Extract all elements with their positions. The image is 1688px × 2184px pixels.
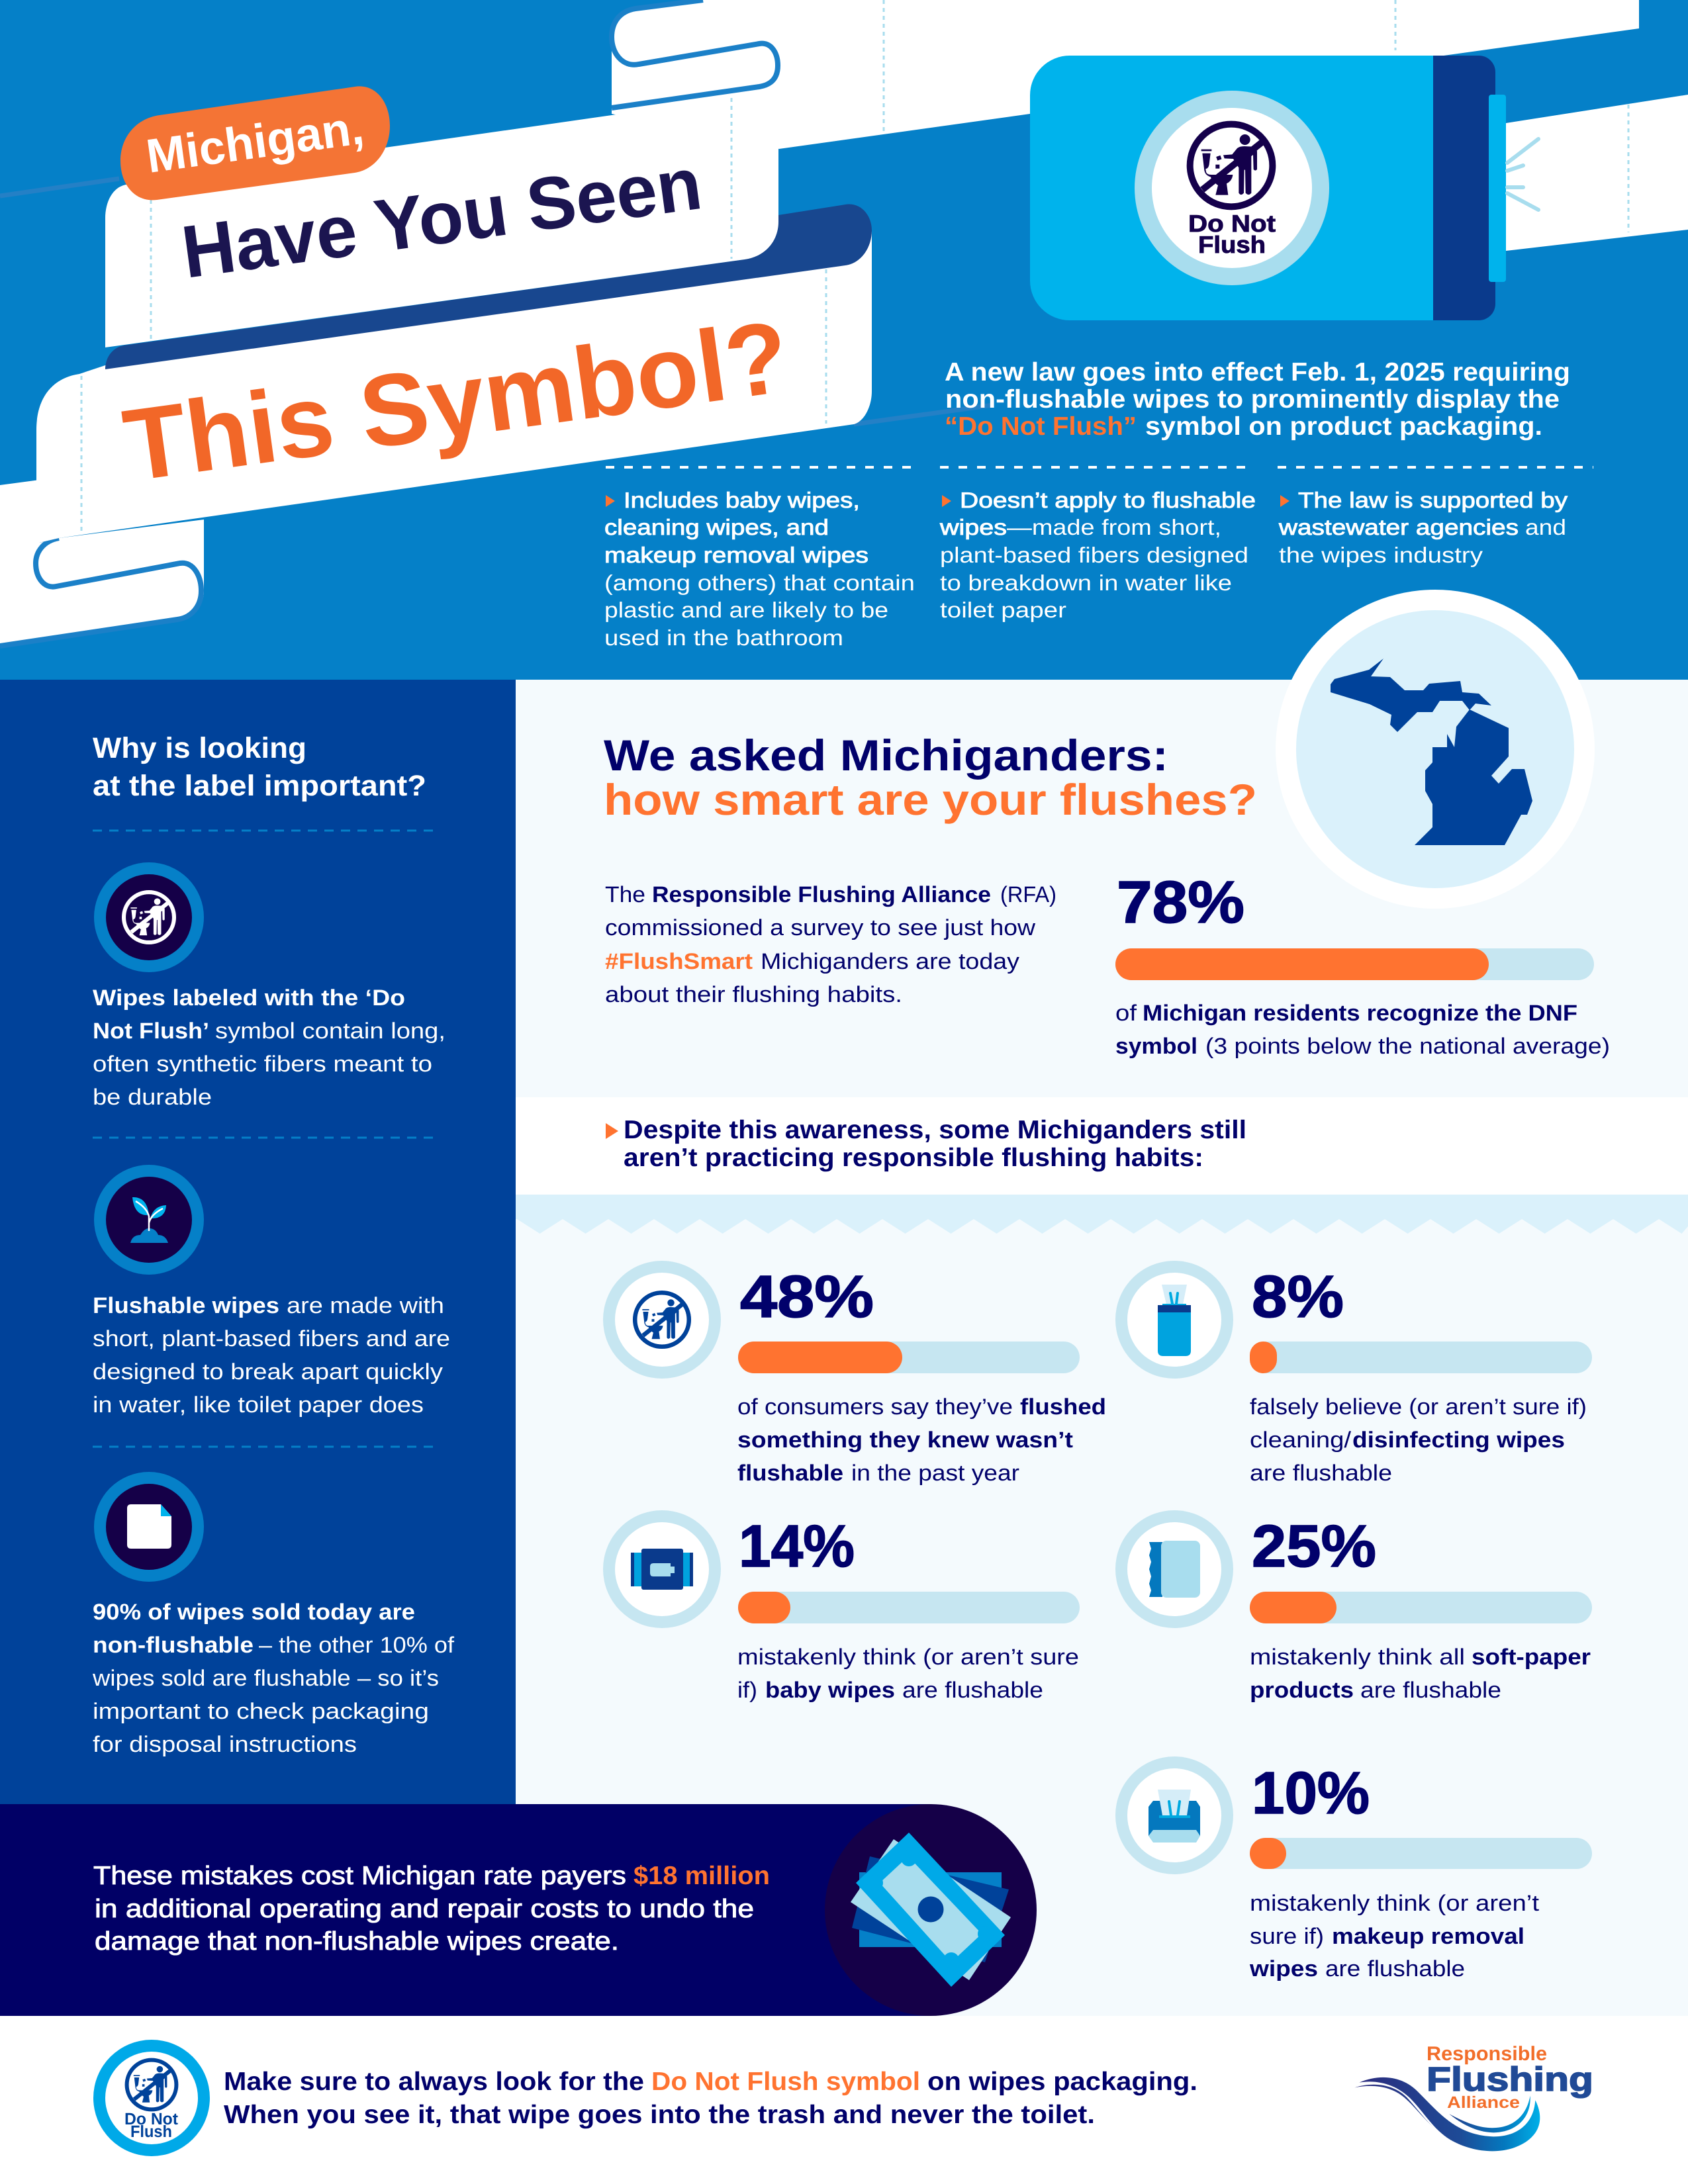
icon: baby wipes pack xyxy=(603,1510,721,1628)
stat: 78 percent recognize symbol: of xyxy=(1115,1001,1137,1026)
stat: 14 percent xyxy=(603,1510,1080,1703)
stat: 25 percent: are flushable xyxy=(1360,1678,1501,1703)
stat: 8 percent: cleaning/ xyxy=(1250,1428,1352,1453)
illustration: wipes dispenser with Do Not Flush symbol: Do Not xyxy=(1188,210,1276,237)
text: 90 percent of wipes xyxy=(92,1600,455,1757)
text: do not flush fibers xyxy=(93,985,445,1110)
icon: makeup wipes tissue box xyxy=(1115,1756,1233,1874)
heading: we asked Michiganders xyxy=(604,731,1257,824)
illustration: wipes dispenser with Do Not Flush symbol: Flush xyxy=(1198,231,1266,258)
text: do not flush fibers: often synthetic fibers meant to xyxy=(93,1052,432,1077)
bullet: doesn't apply to flushable wipes: toilet paper xyxy=(940,598,1066,622)
intro text: new law: “Do Not Flush” xyxy=(945,412,1137,441)
stat: 10 percent: sure if) xyxy=(1250,1924,1324,1949)
stat: 25 percent: products xyxy=(1250,1678,1354,1703)
text: flushable wipes: designed to break apart quickly xyxy=(93,1359,443,1385)
footer: do not flush badge: Do Not xyxy=(124,2110,179,2128)
stat: 48 percent: flushable xyxy=(737,1461,843,1486)
text: survey intro: (RFA) xyxy=(1000,882,1056,907)
footer: call to action text: Make sure to always look for the xyxy=(224,2068,644,2096)
stat: 14 percent: baby wipes xyxy=(765,1678,895,1703)
right paper strip xyxy=(1506,95,1688,251)
upper roll outline xyxy=(612,0,778,108)
stat: 8 percent xyxy=(1115,1261,1592,1486)
stat: 10 percent: wipes xyxy=(1249,1956,1318,1981)
text: cost of mistakes: in additional operating and repair costs to undo the xyxy=(95,1895,754,1923)
stat: 8 percent: falsely believe (or aren’t sure if) xyxy=(1250,1394,1587,1420)
header panel: blue background xyxy=(0,0,1688,680)
text: 90 percent of wipes: 90% of wipes sold today are xyxy=(93,1600,415,1625)
dark ribbon fold xyxy=(105,204,872,369)
stat: 10 percent: are flushable xyxy=(1325,1956,1465,1981)
stat: 8 percent: are flushable xyxy=(1250,1461,1392,1486)
text: do not flush fibers: symbol contain long, xyxy=(215,1019,445,1044)
bullet: includes baby wipes: cleaning wipes, and xyxy=(604,515,829,539)
stat: 78 percent recognize symbol: Michigan residents recognize the DNF xyxy=(1143,1001,1577,1026)
bullet: includes baby wipes: used in the bathroom xyxy=(604,625,843,650)
text: survey intro xyxy=(605,882,1056,1007)
stat: 25 percent: soft-paper xyxy=(1472,1645,1591,1670)
text: survey intro: The xyxy=(605,882,645,907)
text: flushable wipes: short, plant-based fibers and are xyxy=(93,1326,450,1351)
bullet: doesn't apply to flushable wipes: —made from short, xyxy=(1007,515,1221,539)
logo: Responsible Flushing Alliance: Responsible xyxy=(1427,2043,1547,2065)
icon: document page xyxy=(94,1472,204,1582)
icon: soft paper roll xyxy=(1115,1510,1233,1628)
heading: why is looking at the label important xyxy=(93,732,426,802)
lower roll outline xyxy=(0,538,201,646)
title: Michigan pill xyxy=(120,86,390,200)
stat: 10 percent xyxy=(1115,1756,1592,1981)
text: survey intro: about their flushing habits. xyxy=(605,982,902,1007)
text: do not flush fibers: Not Flush’ xyxy=(93,1019,209,1044)
upper white ribbon xyxy=(105,91,778,347)
intro text: new law xyxy=(945,358,1570,441)
text: do not flush fibers: Wipes labeled with the ‘Do xyxy=(93,985,405,1011)
stat: 10 percent: 10% xyxy=(1252,1760,1370,1827)
stat: 78 percent recognize symbol: symbol xyxy=(1115,1034,1197,1059)
stat: 48 percent: of consumers say they’ve xyxy=(737,1394,1013,1420)
text: survey intro: Responsible Flushing Alliance xyxy=(652,882,991,907)
bullet: doesn't apply to flushable wipes: Doesn’t apply to flushable xyxy=(960,488,1256,512)
illustration: wipes dispenser with Do Not Flush symbol xyxy=(1030,56,1538,320)
icon: do not flush xyxy=(603,1261,721,1379)
callout band: despite this awareness: aren’t practicing responsible flushing habits: xyxy=(624,1144,1203,1172)
bullet: includes baby wipes: plastic and are likely to be xyxy=(604,598,888,622)
intro text: new law: symbol on product packaging. xyxy=(1145,412,1542,441)
footer: call to action text: on wipes packaging. xyxy=(927,2068,1197,2096)
stat: 48 percent: 48% xyxy=(740,1264,874,1330)
bullet: supported by wastewater agencies: The law is supported by xyxy=(1298,488,1568,512)
title: This Symbol?: This Symbol? xyxy=(117,299,795,503)
bullet: includes baby wipes: makeup removal wipes xyxy=(604,543,868,567)
footer: do not flush badge xyxy=(93,2040,210,2156)
text: cost of mistakes: $18 million xyxy=(633,1862,770,1890)
text: cost of mistakes xyxy=(93,1862,770,1956)
text: flushable wipes: are made with xyxy=(287,1293,444,1318)
bullet: doesn't apply to flushable wipes: to breakdown in water like xyxy=(940,570,1232,595)
lower left paper strip xyxy=(0,480,204,645)
icon: money bills xyxy=(825,1804,1037,2016)
panel: survey background xyxy=(516,680,1688,2016)
stat: 25 percent: 25% xyxy=(1252,1514,1376,1580)
text: survey intro: #FlushSmart xyxy=(605,949,753,974)
footer: call to action text: When you see it, that wipe goes into the trash and never the toilet. xyxy=(224,2101,1095,2129)
bullet: includes baby wipes: Includes baby wipes, xyxy=(624,488,860,512)
stat: 10 percent: mistakenly think (or aren’t xyxy=(1250,1891,1540,1916)
bullet: doesn't apply to flushable wipes xyxy=(939,488,1256,622)
stat: 48 percent: in the past year xyxy=(851,1461,1019,1486)
text: 90 percent of wipes: wipes sold are flushable – so it’s xyxy=(92,1666,439,1691)
text: cost of mistakes: These mistakes cost Michigan rate payers xyxy=(93,1862,626,1890)
heading: why is looking at the label important: at the label important? xyxy=(93,770,426,802)
stat: 8 percent: 8% xyxy=(1252,1264,1344,1330)
bullet: doesn't apply to flushable wipes: plant-based fibers designed xyxy=(940,543,1248,567)
stat: 14 percent: if) xyxy=(737,1678,757,1703)
bullet: includes baby wipes: (among others) that contain xyxy=(604,570,915,595)
bullet: supported by wastewater agencies: wastewater agencies xyxy=(1278,515,1519,539)
text: cost of mistakes: damage that non-flushable wipes create. xyxy=(95,1927,619,1956)
footer: call to action text: Do Not Flush symbol xyxy=(651,2068,920,2096)
text: 90 percent of wipes: – the other 10% of xyxy=(259,1633,455,1658)
stat: 14 percent: are flushable xyxy=(902,1678,1043,1703)
bullet: supported by wastewater agencies xyxy=(1278,488,1568,567)
stat: 78 percent recognize symbol xyxy=(1115,870,1610,1059)
stat: 78 percent recognize symbol: 78% xyxy=(1117,870,1244,936)
stat: 48 percent: flushed xyxy=(1020,1394,1106,1420)
title: Have You Seen: Have You Seen xyxy=(177,142,706,294)
text: 90 percent of wipes: for disposal instructions xyxy=(93,1732,357,1757)
heading: we asked Michiganders: We asked Michiganders: xyxy=(604,731,1168,780)
text: 90 percent of wipes: non-flushable xyxy=(93,1633,254,1658)
stat: 14 percent: mistakenly think (or aren’t sure xyxy=(737,1645,1079,1670)
text: flushable wipes xyxy=(93,1293,450,1418)
header ribbon artwork xyxy=(0,0,1688,646)
footer: do not flush badge: Flush xyxy=(130,2122,172,2141)
footer: call to action text xyxy=(224,2068,1197,2129)
text: flushable wipes: in water, like toilet paper does xyxy=(93,1392,424,1418)
text: flushable wipes: Flushable wipes xyxy=(93,1293,279,1318)
stat: 8 percent: disinfecting wipes xyxy=(1352,1428,1565,1453)
bullet: doesn't apply to flushable wipes: wipes xyxy=(939,515,1007,539)
icon: disinfecting wipes canister xyxy=(1115,1261,1233,1379)
icon: plant sprout xyxy=(94,1165,204,1275)
stat: 10 percent: makeup removal xyxy=(1332,1924,1524,1949)
stat: 48 percent: something they knew wasn’t xyxy=(737,1428,1073,1453)
bullet: supported by wastewater agencies: the wipes industry xyxy=(1279,543,1483,567)
logo: Responsible Flushing Alliance xyxy=(1354,2043,1593,2151)
text: survey intro: Michiganders are today xyxy=(761,949,1019,974)
stat: 48 percent xyxy=(603,1261,1106,1486)
bullet: supported by wastewater agencies: and xyxy=(1525,515,1566,539)
text: do not flush fibers: be durable xyxy=(93,1085,212,1110)
callout band: despite this awareness: Despite this awareness, some Michiganders still xyxy=(624,1116,1246,1144)
stat: 25 percent: mistakenly think all xyxy=(1250,1645,1465,1670)
heading: why is looking at the label important: Why is looking xyxy=(93,732,306,764)
intro text: new law: A new law goes into effect Feb. 1, 2025 requiring xyxy=(945,358,1570,387)
lower white ribbon xyxy=(36,232,872,543)
stat: 14 percent: 14% xyxy=(739,1514,855,1580)
stat: 25 percent xyxy=(1115,1510,1592,1703)
upper paper strip xyxy=(612,0,1639,149)
panel: why look at the label xyxy=(0,680,516,1804)
text: survey intro: commissioned a survey to see just how xyxy=(605,915,1035,940)
title: Michigan pill: Michigan, xyxy=(143,101,367,183)
intro text: new law: non-flushable wipes to prominently display the xyxy=(945,385,1560,414)
bullet: includes baby wipes xyxy=(604,488,915,650)
heading: we asked Michiganders: how smart are your flushes? xyxy=(604,775,1257,824)
logo: Responsible Flushing Alliance: Flushing xyxy=(1427,2060,1593,2098)
callout band: 18 million cost xyxy=(0,1804,1037,2016)
callout band: despite this awareness xyxy=(516,1097,1688,1195)
icon: Michigan map in circle xyxy=(1276,590,1595,909)
logo: Responsible Flushing Alliance: Alliance xyxy=(1447,2093,1520,2112)
stat: 78 percent recognize symbol: (3 points below the national average) xyxy=(1205,1034,1610,1059)
icon: do not flush xyxy=(94,862,204,972)
text: 90 percent of wipes: important to check packaging xyxy=(93,1699,429,1724)
